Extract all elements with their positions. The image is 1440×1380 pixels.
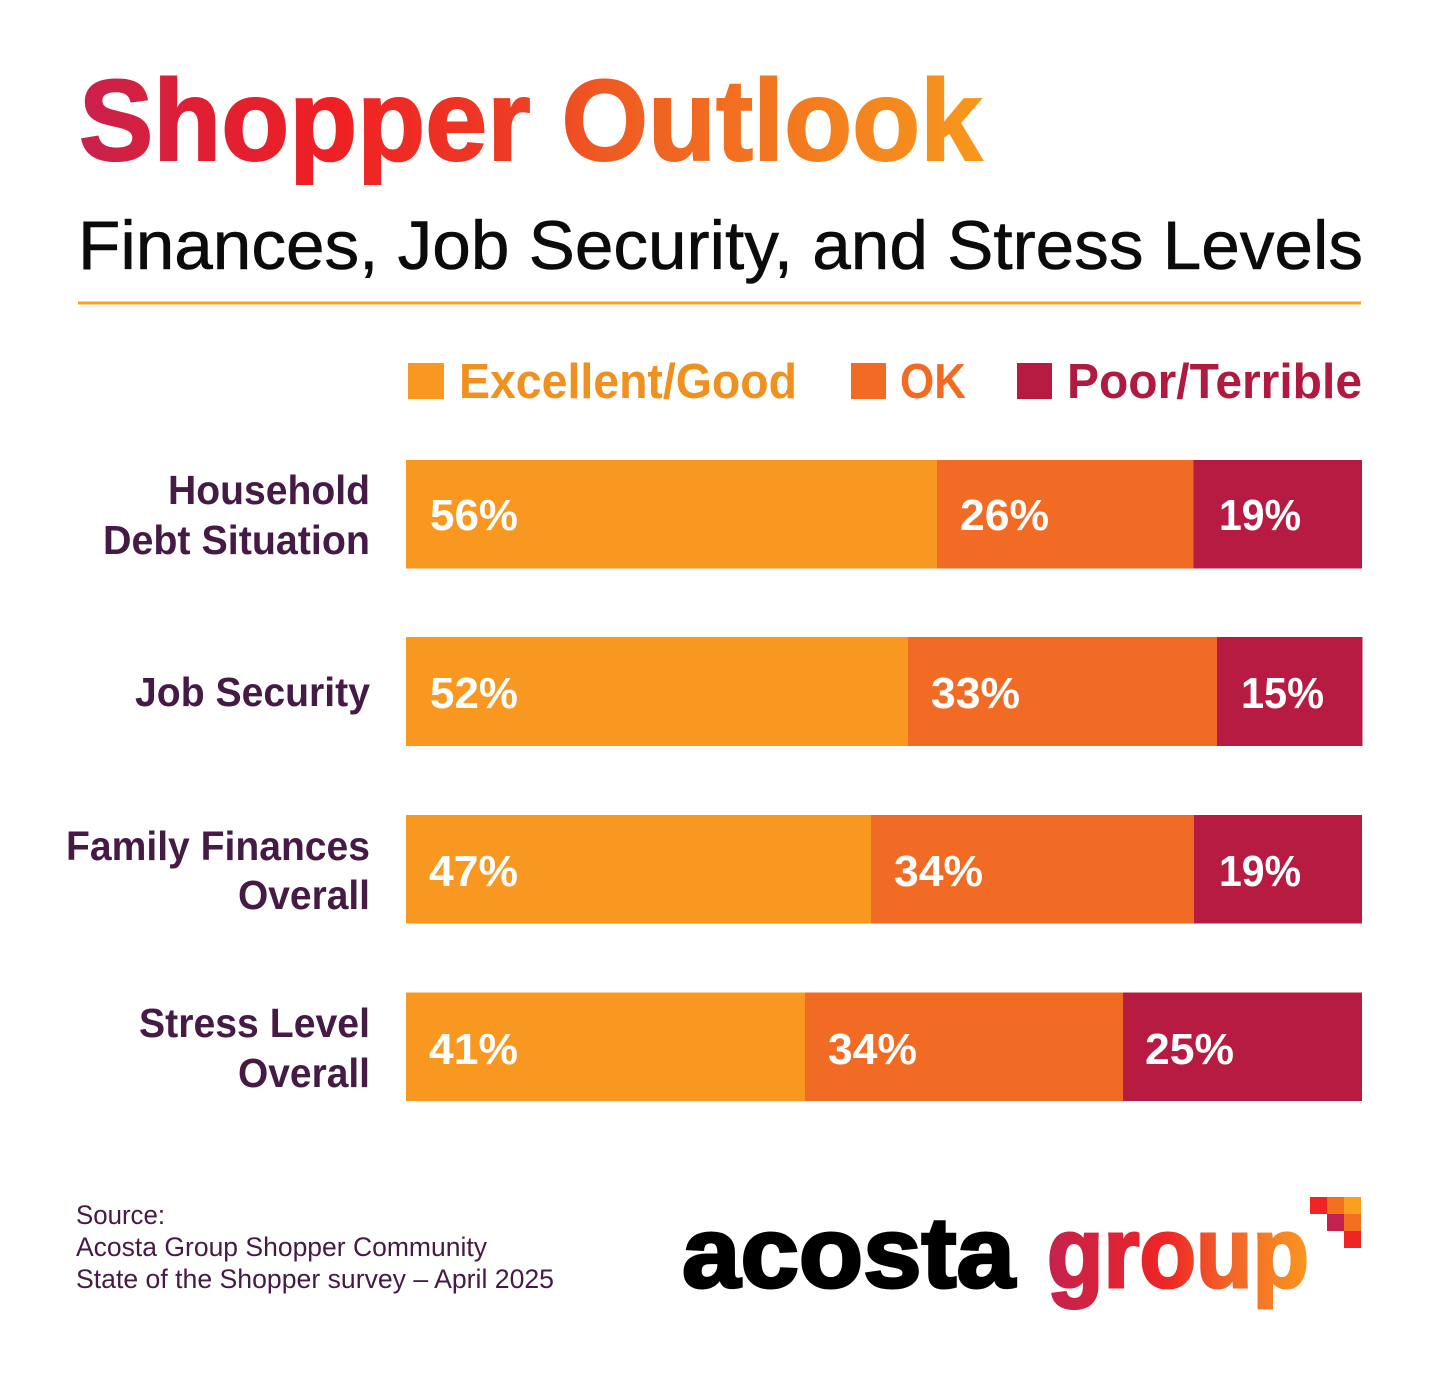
legend item: Poor/Terrible: Poor/Terrible [1067,355,1362,409]
segment: 47%: 47% [429,847,518,896]
segment: 34% [871,815,1194,924]
logo icon: pixel squares [1310,1197,1361,1248]
segment: 25%: 25% [1145,1025,1234,1074]
row label [103,467,370,563]
logo: acosta group [682,1197,1361,1309]
row: Job Security [135,637,1362,746]
subtitle: Finances, Job Security, and Stress Levels [78,207,1363,284]
row label: Job Security [135,669,370,715]
segment: 41%: 41% [429,1025,518,1074]
segment: 26%: 26% [960,491,1049,540]
segment: 26% [937,460,1194,568]
legend item: OK: OK [900,355,966,409]
source note: Acosta Group Shopper Community [76,1232,487,1262]
segment: 34% [805,992,1123,1101]
segment: 19% [1194,815,1362,924]
segment: 41% [406,992,805,1101]
segment: 34%: 34% [828,1025,917,1074]
row label [139,1000,370,1096]
segment: 52%: 52% [430,669,518,718]
legend [408,355,1362,409]
row label: Household [168,467,370,513]
legend item: Excellent/Good: Excellent/Good [459,355,797,409]
row label: Debt Situation [103,517,370,563]
title: Shopper Outlook [79,57,983,185]
segment: 47% [406,815,871,924]
segment: 56% [406,460,937,568]
row label: Stress Level [139,1000,370,1046]
source note [76,1200,554,1294]
segment: 52% [406,637,908,746]
segment: 34%: 34% [894,847,983,896]
logo wordmark: acosta: acosta [682,1197,1016,1309]
source note: Source: [76,1200,165,1230]
segment: 56%: 56% [430,491,518,540]
segment: 33%: 33% [931,669,1020,718]
source note: State of the Shopper survey – April 2025 [76,1264,554,1294]
segment: 33% [908,637,1217,746]
segment: 15%: 15% [1241,669,1324,718]
row: Family Finances Overall [66,815,1362,924]
segment: 15% [1217,637,1362,746]
row label: Overall [238,872,370,918]
segment: 19%: 19% [1219,847,1301,896]
row label [66,823,370,918]
row label: Overall [238,1050,370,1096]
logo wordmark: group: group [1047,1197,1309,1309]
segment: 25% [1123,992,1362,1101]
stacked bar chart [66,460,1362,1101]
segment: 19%: 19% [1219,491,1301,540]
row: Household Debt Situation [103,460,1362,568]
row: Stress Level Overall [139,992,1362,1101]
row label: Family Finances [66,823,370,869]
legend item: OK [851,355,966,409]
segment: 19% [1194,460,1362,568]
